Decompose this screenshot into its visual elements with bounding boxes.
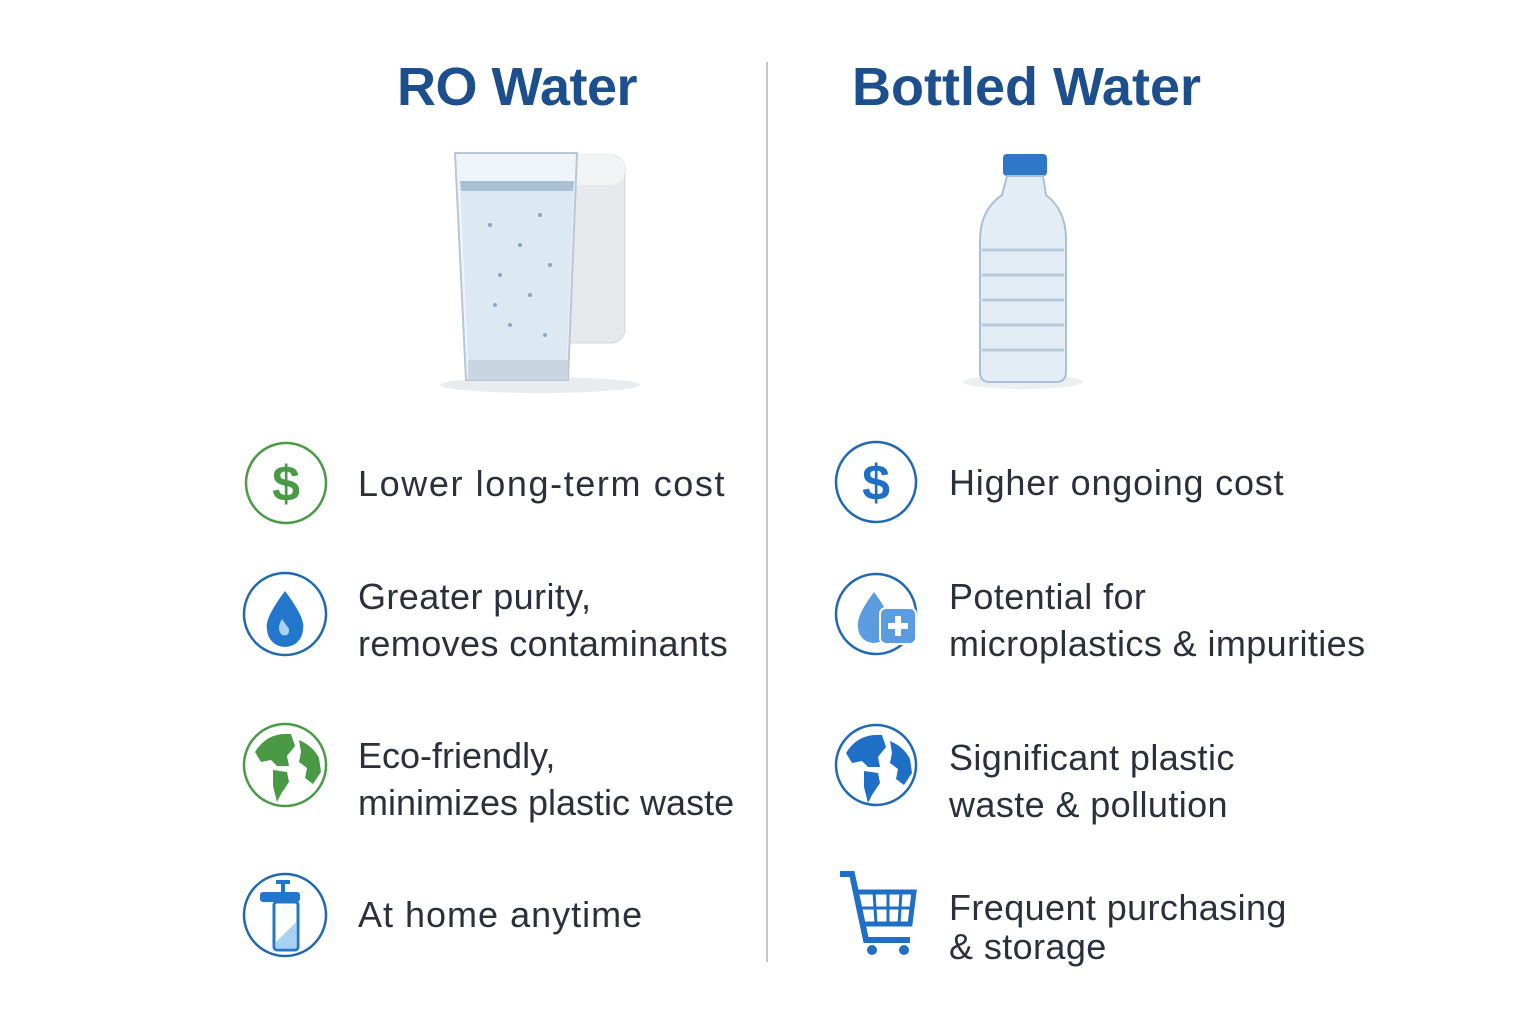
image: glass with RO unit (440, 152, 640, 393)
text: greater purity: removes contaminants (358, 623, 728, 664)
icon: shopping cart (840, 871, 917, 955)
text: significant plastic waste: Significant plastic (949, 737, 1235, 778)
icon: blue dollar (834, 440, 918, 524)
text: potential for microplastics (949, 576, 1366, 664)
icon: blue globe (834, 724, 918, 806)
text: at home anytime: At home anytime (358, 894, 643, 935)
icon: green dollar: $ (272, 456, 300, 512)
divider (766, 62, 768, 962)
text: potential for microplastics: Potential for (949, 576, 1146, 617)
title: Bottled Water: Bottled Water (852, 57, 1201, 117)
image: plastic bottle (963, 154, 1083, 389)
text: eco-friendly: Eco-friendly, (358, 735, 555, 776)
text: lower long-term cost: Lower long-term cost (358, 463, 726, 504)
text: eco-friendly: minimizes plastic waste (358, 782, 734, 823)
text: potential for microplastics: microplastics & impurities (949, 623, 1366, 664)
text: significant plastic waste (949, 737, 1235, 825)
icon: green dollar (244, 442, 328, 524)
text: eco-friendly (358, 735, 734, 823)
text: greater purity (358, 576, 728, 664)
icon: blue dollar: $ (862, 455, 890, 511)
text: frequent purchasing: & storage (949, 926, 1107, 967)
text: greater purity: Greater purity, (358, 576, 591, 617)
text: significant plastic waste: waste & pollution (949, 784, 1228, 825)
icon: green globe (242, 722, 328, 808)
text: frequent purchasing (949, 887, 1287, 967)
title: RO Water: RO Water (397, 57, 637, 117)
icon: drop with plus (834, 572, 918, 656)
icon: tap and jug (242, 872, 328, 958)
text: higher ongoing cost: Higher ongoing cost (949, 462, 1284, 503)
icon: water drop (242, 572, 328, 656)
text: frequent purchasing: Frequent purchasing (949, 887, 1287, 928)
